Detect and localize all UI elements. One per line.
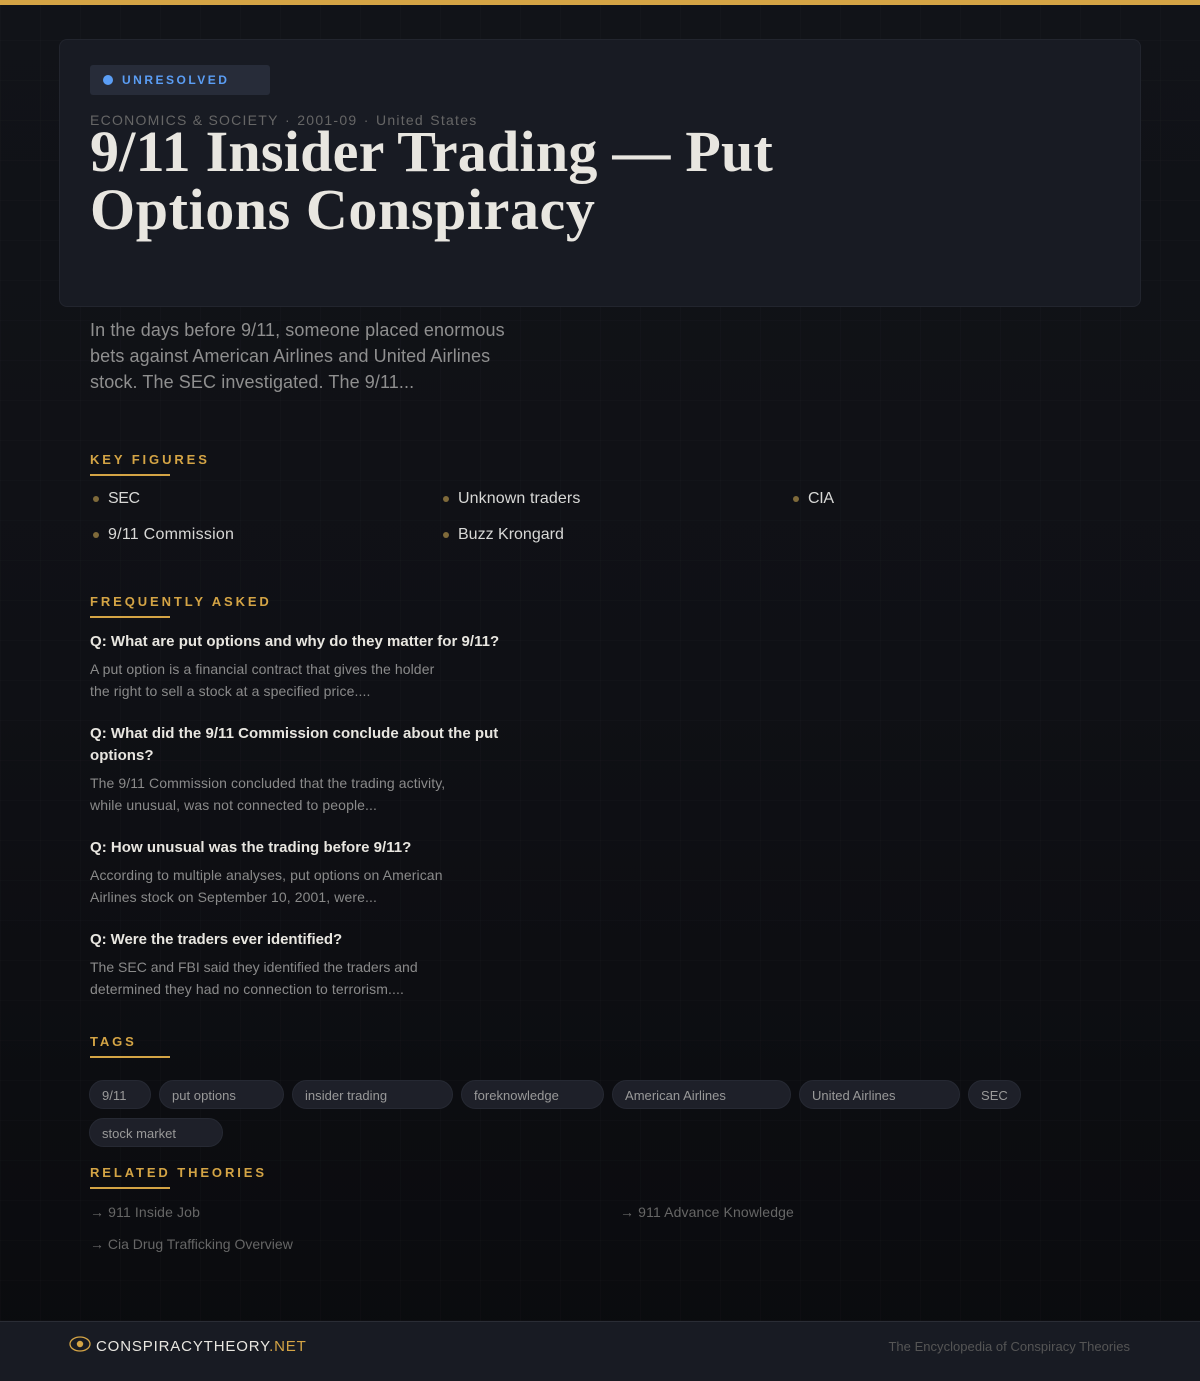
FAQ 2 answer: [90, 775, 445, 813]
tag: 9/11: 9/11: [102, 1088, 126, 1103]
FAQ 2 question: [90, 725, 498, 764]
FAQ 1 answer: A put option is a financial contract that gives the holder: [90, 661, 434, 677]
tag: stock market: stock market: [102, 1126, 176, 1141]
heading: key figures: KEY FIGURES: [90, 452, 210, 467]
FAQ 3 answer: Airlines stock on September 10, 2001, were...: [90, 889, 377, 905]
related link: 911 Inside Job: → 911 Inside Job: [90, 1204, 200, 1220]
FAQ 3 answer: [90, 867, 443, 905]
FAQ 4 answer: [90, 959, 418, 997]
brand wordmark: CONSPIRACYTHEORY.NET: [96, 1338, 307, 1355]
tag: insider trading: [292, 1080, 453, 1109]
footer bar: [0, 1321, 1200, 1381]
tag: put options: put options: [172, 1088, 236, 1103]
figure: SEC: [93, 490, 140, 507]
top accent bar: [0, 0, 1200, 5]
status badge: unresolved: [90, 65, 270, 95]
tag: American Airlines: American Airlines: [625, 1088, 726, 1103]
list: key figures: [93, 490, 834, 543]
icon: status dot: [103, 75, 113, 85]
FAQ 3 answer: According to multiple analyses, put options on American: [90, 867, 443, 883]
related link: 911 Advance Knowledge: → 911 Advance Knowledge: [620, 1204, 794, 1220]
title: Options Conspiracy: [90, 177, 596, 242]
tag list: [89, 1080, 1021, 1147]
FAQ 1 answer: [90, 661, 434, 699]
tag: foreknowledge: foreknowledge: [474, 1088, 559, 1103]
tag: SEC: [968, 1080, 1021, 1109]
heading: tags: TAGS: [90, 1034, 137, 1049]
panel: hero header: [59, 39, 1141, 307]
figure: SEC: SEC: [108, 490, 140, 507]
tag: United Airlines: [799, 1080, 960, 1109]
tag: SEC: SEC: [981, 1088, 1008, 1103]
footer tagline: The Encyclopedia of Conspiracy Theories: [888, 1339, 1130, 1354]
tag: insider trading: insider trading: [305, 1088, 387, 1103]
title: [90, 119, 773, 242]
figure: 9/11 Commission: 9/11 Commission: [108, 526, 234, 543]
figure: Unknown traders: Unknown traders: [458, 490, 580, 507]
title: 9/11 Insider Trading — Put: [90, 119, 773, 184]
tag: stock market: [89, 1118, 223, 1147]
related link: Cia Drug Trafficking Overview: → Cia Drug Trafficking Overview: [90, 1236, 293, 1252]
heading: related theories: RELATED THEORIES: [90, 1165, 267, 1180]
summary text: bets against American Airlines and United Airlines: [90, 346, 490, 366]
figure: CIA: [793, 490, 834, 507]
icon: eye logo: [69, 1336, 91, 1352]
tag: foreknowledge: [461, 1080, 604, 1109]
figure: Buzz Krongard: Buzz Krongard: [458, 526, 564, 543]
FAQ 4 question: Q: Were the traders ever identified?: [90, 931, 342, 948]
FAQ 3 question: Q: How unusual was the trading before 9/11?: [90, 839, 411, 856]
summary text: In the days before 9/11, someone placed enormous: [90, 320, 505, 340]
tag: American Airlines: [612, 1080, 791, 1109]
badge label: UNRESOLVED: [122, 73, 229, 87]
figure: CIA: CIA: [808, 490, 834, 507]
tag: put options: [159, 1080, 284, 1109]
category and date meta line: ECONOMICS & SOCIETY · 2001-09 · United States: [90, 112, 477, 128]
FAQ 4 answer: determined they had no connection to terrorism....: [90, 981, 404, 997]
FAQ 2 question: Q: What did the 9/11 Commission conclude about the put: [90, 725, 498, 742]
FAQ 4 answer: The SEC and FBI said they identified the traders and: [90, 959, 418, 975]
FAQ 2 answer: The 9/11 Commission concluded that the trading activity,: [90, 775, 445, 791]
FAQ 1 answer: the right to sell a stock at a specified price....: [90, 683, 370, 699]
summary text: [90, 320, 505, 392]
FAQ 2 question: options?: [90, 747, 154, 764]
heading: frequently asked: FREQUENTLY ASKED: [90, 594, 272, 609]
summary text: stock. The SEC investigated. The 9/11...: [90, 372, 414, 392]
FAQ 1 question: Q: What are put options and why do they matter for 9/11?: [90, 633, 499, 650]
tag: 9/11: [89, 1080, 151, 1109]
tag: United Airlines: United Airlines: [812, 1088, 896, 1103]
FAQ 2 answer: while unusual, was not connected to people...: [90, 797, 377, 813]
